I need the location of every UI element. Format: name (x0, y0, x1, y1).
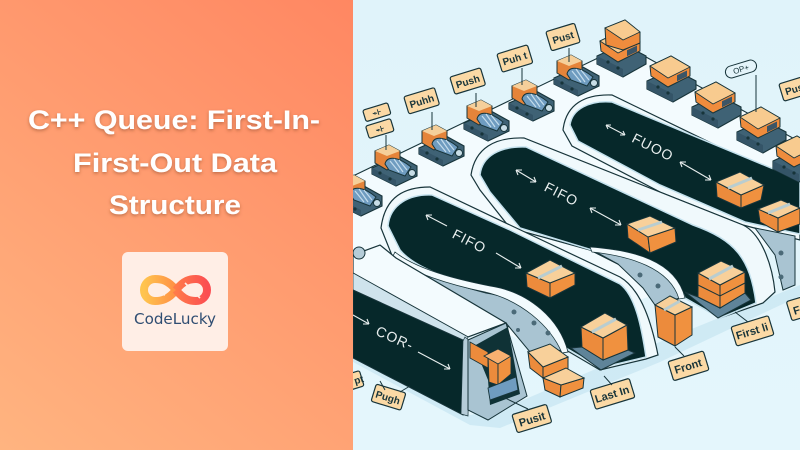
label: Last In (590, 378, 635, 409)
conveyor belt: FUOO (563, 95, 800, 290)
box on middle belt (627, 216, 676, 253)
label: Push lower left: Pugh (374, 390, 401, 407)
belt label: COR- (374, 323, 416, 353)
carts row right (597, 20, 800, 182)
carts row left (337, 55, 599, 216)
roller (488, 377, 518, 400)
black side face (353, 290, 465, 415)
belt label: FIFO (542, 179, 581, 209)
box on front belt (526, 260, 575, 298)
sign OP+ (724, 59, 758, 79)
label: F cut-off (786, 293, 800, 321)
conveyor belt: FIFO middle (471, 138, 775, 318)
platform: white deck behind conveyors (353, 57, 800, 340)
label: Front (668, 351, 709, 381)
pallet with First In box (685, 261, 751, 318)
grey side panel (396, 262, 566, 352)
label: pt cut-off: pt (353, 374, 366, 387)
label leader lines (380, 312, 748, 409)
panel: conveyor illustration background (353, 0, 800, 450)
belt label: FUOO (630, 130, 676, 164)
push signs top row: Push (455, 74, 481, 91)
arrows (606, 125, 711, 180)
push signs top row: Puh t (502, 50, 529, 68)
bolt (353, 247, 365, 259)
stacked boxes (528, 344, 584, 397)
boxes on FUOO belt right (758, 200, 800, 232)
sign OP+: OP+ (732, 63, 751, 76)
push signs top row: Puhh (409, 93, 436, 111)
label: pt cut-off (338, 370, 366, 392)
arrows (353, 315, 450, 369)
grey side panel (596, 252, 680, 305)
push signs top row: ⌁⊦ (371, 107, 383, 118)
pallet with Last In box (571, 313, 635, 370)
label: Front: Front (673, 357, 704, 377)
conveyor housing: front belt COR (353, 245, 527, 420)
logo wordmark: CodeLucky (134, 310, 216, 328)
push signs top row: ⌁⊦ (375, 124, 386, 135)
arrows (516, 170, 621, 225)
belt label: FIFO (450, 226, 489, 256)
end frame (468, 323, 527, 420)
label: Push (512, 404, 552, 433)
sign posts (386, 48, 756, 150)
side strip (353, 273, 468, 343)
title: First-Out Data (73, 148, 278, 178)
arrows (426, 215, 521, 268)
belt black surface (388, 195, 646, 368)
box on FUOO belt (716, 172, 764, 208)
conveyor belt: FIFO front (381, 187, 658, 370)
push signs top row (363, 23, 580, 139)
floor shadow under conveyors (353, 285, 800, 428)
push signs top row: Pust (551, 30, 576, 47)
title: C++ Queue: First-In- (28, 105, 320, 135)
top white face (353, 245, 506, 337)
title (28, 105, 320, 220)
logo card (122, 252, 228, 351)
sign Push right (779, 75, 800, 101)
label: First In (731, 316, 774, 346)
boxes in opening (470, 342, 511, 385)
label: Last In: Last In (594, 384, 631, 406)
title: Structure (109, 190, 241, 220)
icon: infinity logo (144, 279, 207, 301)
label: Push lower left (371, 384, 406, 410)
Front box (655, 296, 692, 346)
label: First In: First li (735, 321, 770, 343)
grey rim panel (755, 228, 795, 290)
panel: left gradient background (0, 0, 353, 450)
label: Push: Pusit (518, 410, 547, 430)
